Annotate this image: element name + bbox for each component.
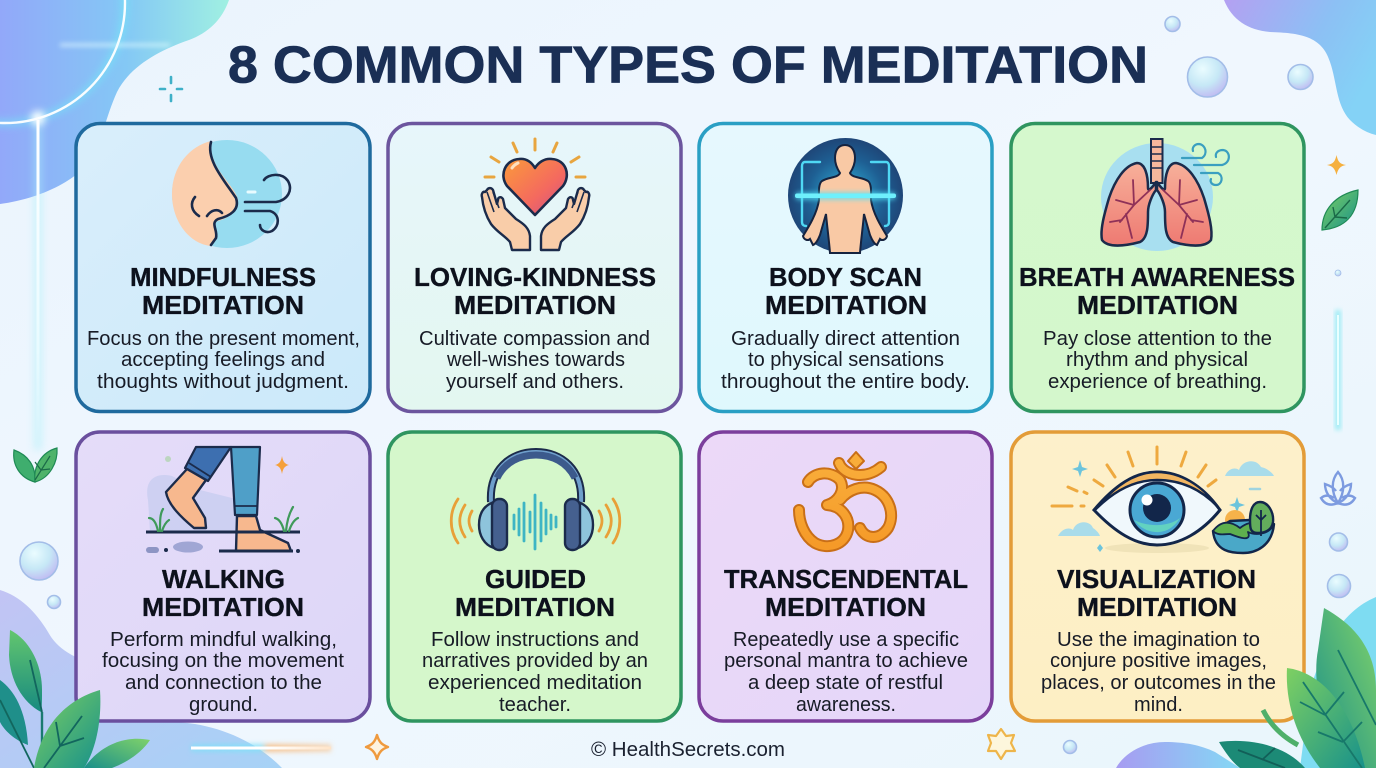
- description: rhythm and physical: [1066, 349, 1248, 371]
- description: a deep state of restful: [748, 672, 943, 694]
- description: Perform mindful walking,: [110, 629, 337, 651]
- description: focusing on the movement: [102, 650, 344, 672]
- card 3: body scan meditation: [699, 124, 992, 412]
- description: Cultivate compassion and: [419, 328, 650, 350]
- heading: MEDITATION: [142, 592, 304, 622]
- background blob: right edge: [1300, 597, 1376, 768]
- description: Focus on the present moment,: [87, 328, 360, 350]
- description: ground.: [189, 694, 258, 716]
- lotus: right: [1321, 472, 1355, 505]
- heading: MEDITATION: [765, 592, 926, 622]
- icon: heart in hands: [482, 139, 589, 250]
- heading: GUIDED: [485, 564, 586, 594]
- sparkle: teal: [160, 77, 182, 101]
- star: gold: [1327, 155, 1346, 175]
- bubbles: right: [1064, 533, 1350, 754]
- bubbles: top right: [1165, 16, 1341, 276]
- icon: eye and landscape: [1052, 447, 1274, 553]
- description: experienced meditation: [428, 672, 642, 694]
- card 8: visualization meditation: [1011, 432, 1304, 721]
- description: accepting feelings and: [121, 349, 325, 371]
- star: bottom orange: [366, 735, 388, 759]
- neon line: right: [1335, 310, 1341, 430]
- title: 8 COMMON TYPES OF MEDITATION: [228, 36, 1148, 94]
- card 4: breath awareness meditation: [1011, 124, 1304, 412]
- icon: headphones: [451, 452, 620, 550]
- description: mind.: [1134, 694, 1183, 716]
- background blob: top right: [1224, 0, 1376, 135]
- card 1: mindfulness meditation: [76, 124, 370, 412]
- heading: MEDITATION: [1077, 592, 1237, 622]
- description: thoughts without judgment.: [97, 371, 349, 393]
- neon arc and line: top left: [0, 0, 170, 450]
- description: throughout the entire body.: [721, 371, 970, 393]
- description: narratives provided by an: [422, 650, 648, 672]
- icon: lungs: [1101, 139, 1229, 251]
- heading: TRANSCENDENTAL: [724, 564, 968, 594]
- description: personal mantra to achieve: [724, 650, 968, 672]
- background blob: bottom left: [0, 590, 282, 768]
- heading: MEDITATION: [1077, 290, 1238, 320]
- heading: MINDFULNESS: [130, 262, 316, 292]
- heading: BREATH AWARENESS: [1019, 262, 1295, 292]
- description: Pay close attention to the: [1043, 328, 1272, 350]
- description: teacher.: [499, 694, 571, 716]
- description: well-wishes towards: [446, 349, 625, 371]
- description: places, or outcomes in the: [1041, 672, 1276, 694]
- heading: WALKING: [162, 564, 285, 594]
- description: Follow instructions and: [431, 629, 639, 651]
- leaf: right: [1322, 190, 1358, 230]
- description: experience of breathing.: [1048, 371, 1267, 393]
- card 7: transcendental meditation: [699, 432, 992, 721]
- icon: body scan: [788, 138, 903, 253]
- description: Repeatedly use a specific: [733, 629, 959, 651]
- card 5: walking meditation: [76, 432, 370, 721]
- star: bottom gold outline: [988, 729, 1015, 759]
- heading: BODY SCAN: [769, 262, 922, 292]
- description: to physical sensations: [748, 349, 944, 371]
- description: conjure positive images,: [1050, 650, 1267, 672]
- description: and connection to the: [125, 672, 322, 694]
- heading: MEDITATION: [455, 592, 615, 622]
- description: awareness.: [796, 694, 896, 716]
- icon: nose and breath: [172, 140, 290, 248]
- icon: om symbol: [799, 452, 891, 546]
- leaves: bottom right: [1219, 608, 1376, 768]
- heading: MEDITATION: [765, 290, 927, 320]
- card 2: loving-kindness meditation: [388, 124, 681, 412]
- heading: VISUALIZATION: [1057, 564, 1256, 594]
- description: yourself and others.: [446, 371, 624, 393]
- leaves: left: [14, 448, 57, 482]
- card 6: guided meditation: [388, 432, 681, 721]
- background blob: bottom right: [1116, 742, 1240, 768]
- heading: MEDITATION: [454, 290, 616, 320]
- bubbles: left: [20, 542, 60, 608]
- background blob: top left: [0, 0, 229, 204]
- neon line: bottom: [191, 744, 331, 752]
- description: Use the imagination to: [1057, 629, 1260, 651]
- icon: walking feet: [146, 447, 300, 553]
- leaves: bottom left: [0, 630, 150, 768]
- heading: LOVING-KINDNESS: [414, 262, 656, 292]
- heading: MEDITATION: [142, 290, 304, 320]
- description: Gradually direct attention: [731, 328, 960, 350]
- copyright footer: © HealthSecrets.com: [591, 739, 785, 761]
